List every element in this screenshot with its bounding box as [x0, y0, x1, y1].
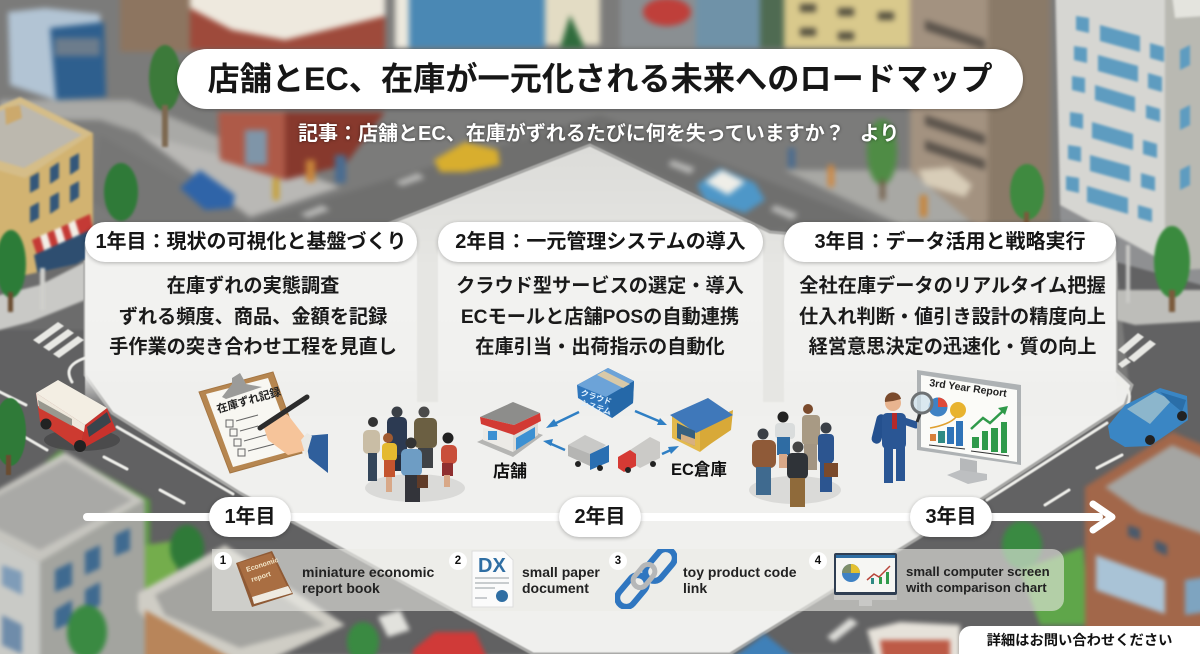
text: year 2 tasks: [456, 275, 744, 358]
icon: report monitor: [917, 370, 1021, 484]
icon: blue truck: [568, 435, 609, 471]
badge 1: [214, 552, 232, 570]
caption 2: document: [522, 580, 589, 596]
badge 3: 3: [615, 555, 621, 567]
caption 1: report book: [302, 580, 380, 596]
text: year 3 tasks: [799, 275, 1106, 358]
milestone: year 1: 1年目: [224, 506, 276, 528]
icon: clipboard with hand: [199, 372, 328, 473]
caption 2: [522, 564, 600, 596]
contact note: [959, 626, 1200, 654]
icon: computer screen with chart: [834, 553, 897, 606]
icon: cloud system box: システム: [579, 398, 612, 417]
badge 1: 1: [220, 555, 226, 567]
caption 3: toy product code: [683, 564, 797, 580]
heading: year 3: 3年目：データ活用と戦略実行: [814, 231, 1086, 253]
heading: year 1: [85, 222, 417, 262]
text: year 2 tasks: クラウド型サービスの選定・導入: [456, 276, 744, 297]
heading: year 3: [784, 222, 1116, 262]
subtitle: 記事：店舗とEC、在庫がずれるたびに何を失っていますか？ より: [298, 123, 899, 145]
badge 2: [449, 552, 467, 570]
caption 4: small computer screen: [906, 564, 1050, 579]
caption 1: [302, 564, 434, 596]
heading: year 2: [438, 222, 763, 262]
icon: report monitor: 3rd Year Report: [929, 377, 1008, 400]
label: store: 店舗: [493, 461, 527, 481]
text: year 3 tasks: 経営意思決定の迅速化・質の向上: [809, 337, 1096, 358]
text: year 1 tasks: [109, 275, 397, 358]
label: warehouse: EC倉庫: [671, 459, 727, 479]
icon: store: [477, 402, 543, 457]
icon: red truck: [618, 437, 660, 473]
text: year 2 tasks: ECモールと店舗POSの自動連携: [461, 306, 739, 328]
icon: chain link: [615, 549, 677, 609]
caption 3: [683, 564, 797, 596]
icon: cloud system box: クラウド: [579, 387, 613, 407]
icon: magnifier: [912, 393, 932, 422]
caption 2: small paper: [522, 564, 600, 580]
icon: businessman: [871, 392, 916, 483]
text: year 1 tasks: ずれる頻度、商品、金額を記録: [119, 306, 387, 328]
title: 店舗とEC、在庫が一元化される未来へのロードマップ: [207, 61, 993, 97]
text: year 3 tasks: 仕入れ判断・値引き設計の精度向上: [799, 306, 1106, 328]
milestone: year 2: 2年目: [574, 506, 626, 528]
text: year 2 tasks: 在庫引当・出荷指示の自動化: [475, 337, 725, 358]
icon: economic report book: [236, 551, 293, 607]
contact note: 詳細はお問い合わせください: [987, 633, 1172, 649]
arrows: [543, 411, 679, 454]
icon: economic report book: Economic: [245, 557, 280, 574]
badge 4: 4: [815, 555, 821, 567]
icon: warehouse: [670, 398, 733, 452]
icon: cloud system box: [577, 368, 634, 418]
icon: clipboard with hand: 在庫ずれ記録: [215, 384, 282, 416]
caption 3: link: [683, 580, 707, 596]
badge 4: [809, 552, 827, 570]
caption 1: miniature economic: [302, 564, 434, 580]
icon: economic report book: report: [250, 571, 272, 584]
text: year 1 tasks: 手作業の突き合わせ工程を見直し: [109, 337, 397, 358]
text: year 1 tasks: 在庫ずれの実態調査: [167, 276, 339, 297]
badge 3: [609, 552, 627, 570]
icon: people group left: [363, 406, 465, 502]
text: year 3 tasks: 全社在庫データのリアルタイム把握: [799, 276, 1106, 297]
icon: DX document: [472, 550, 514, 608]
milestone: year 1: [209, 497, 291, 537]
heading: year 1: 1年目：現状の可視化と基盤づくり: [95, 231, 407, 253]
milestone: year 2: [559, 497, 641, 537]
badge 2: 2: [455, 555, 461, 567]
milestone: year 3: 3年目: [925, 506, 977, 528]
caption 4: [906, 564, 1050, 595]
legend strip: [212, 549, 1064, 611]
caption 4: with comparison chart: [906, 580, 1047, 595]
heading: year 2: 2年目：一元管理システムの導入: [455, 231, 746, 253]
title: [177, 49, 1023, 109]
icon: DX document: DX: [478, 555, 506, 577]
icon: people group right: [749, 404, 841, 507]
milestone: year 3: [910, 497, 992, 537]
